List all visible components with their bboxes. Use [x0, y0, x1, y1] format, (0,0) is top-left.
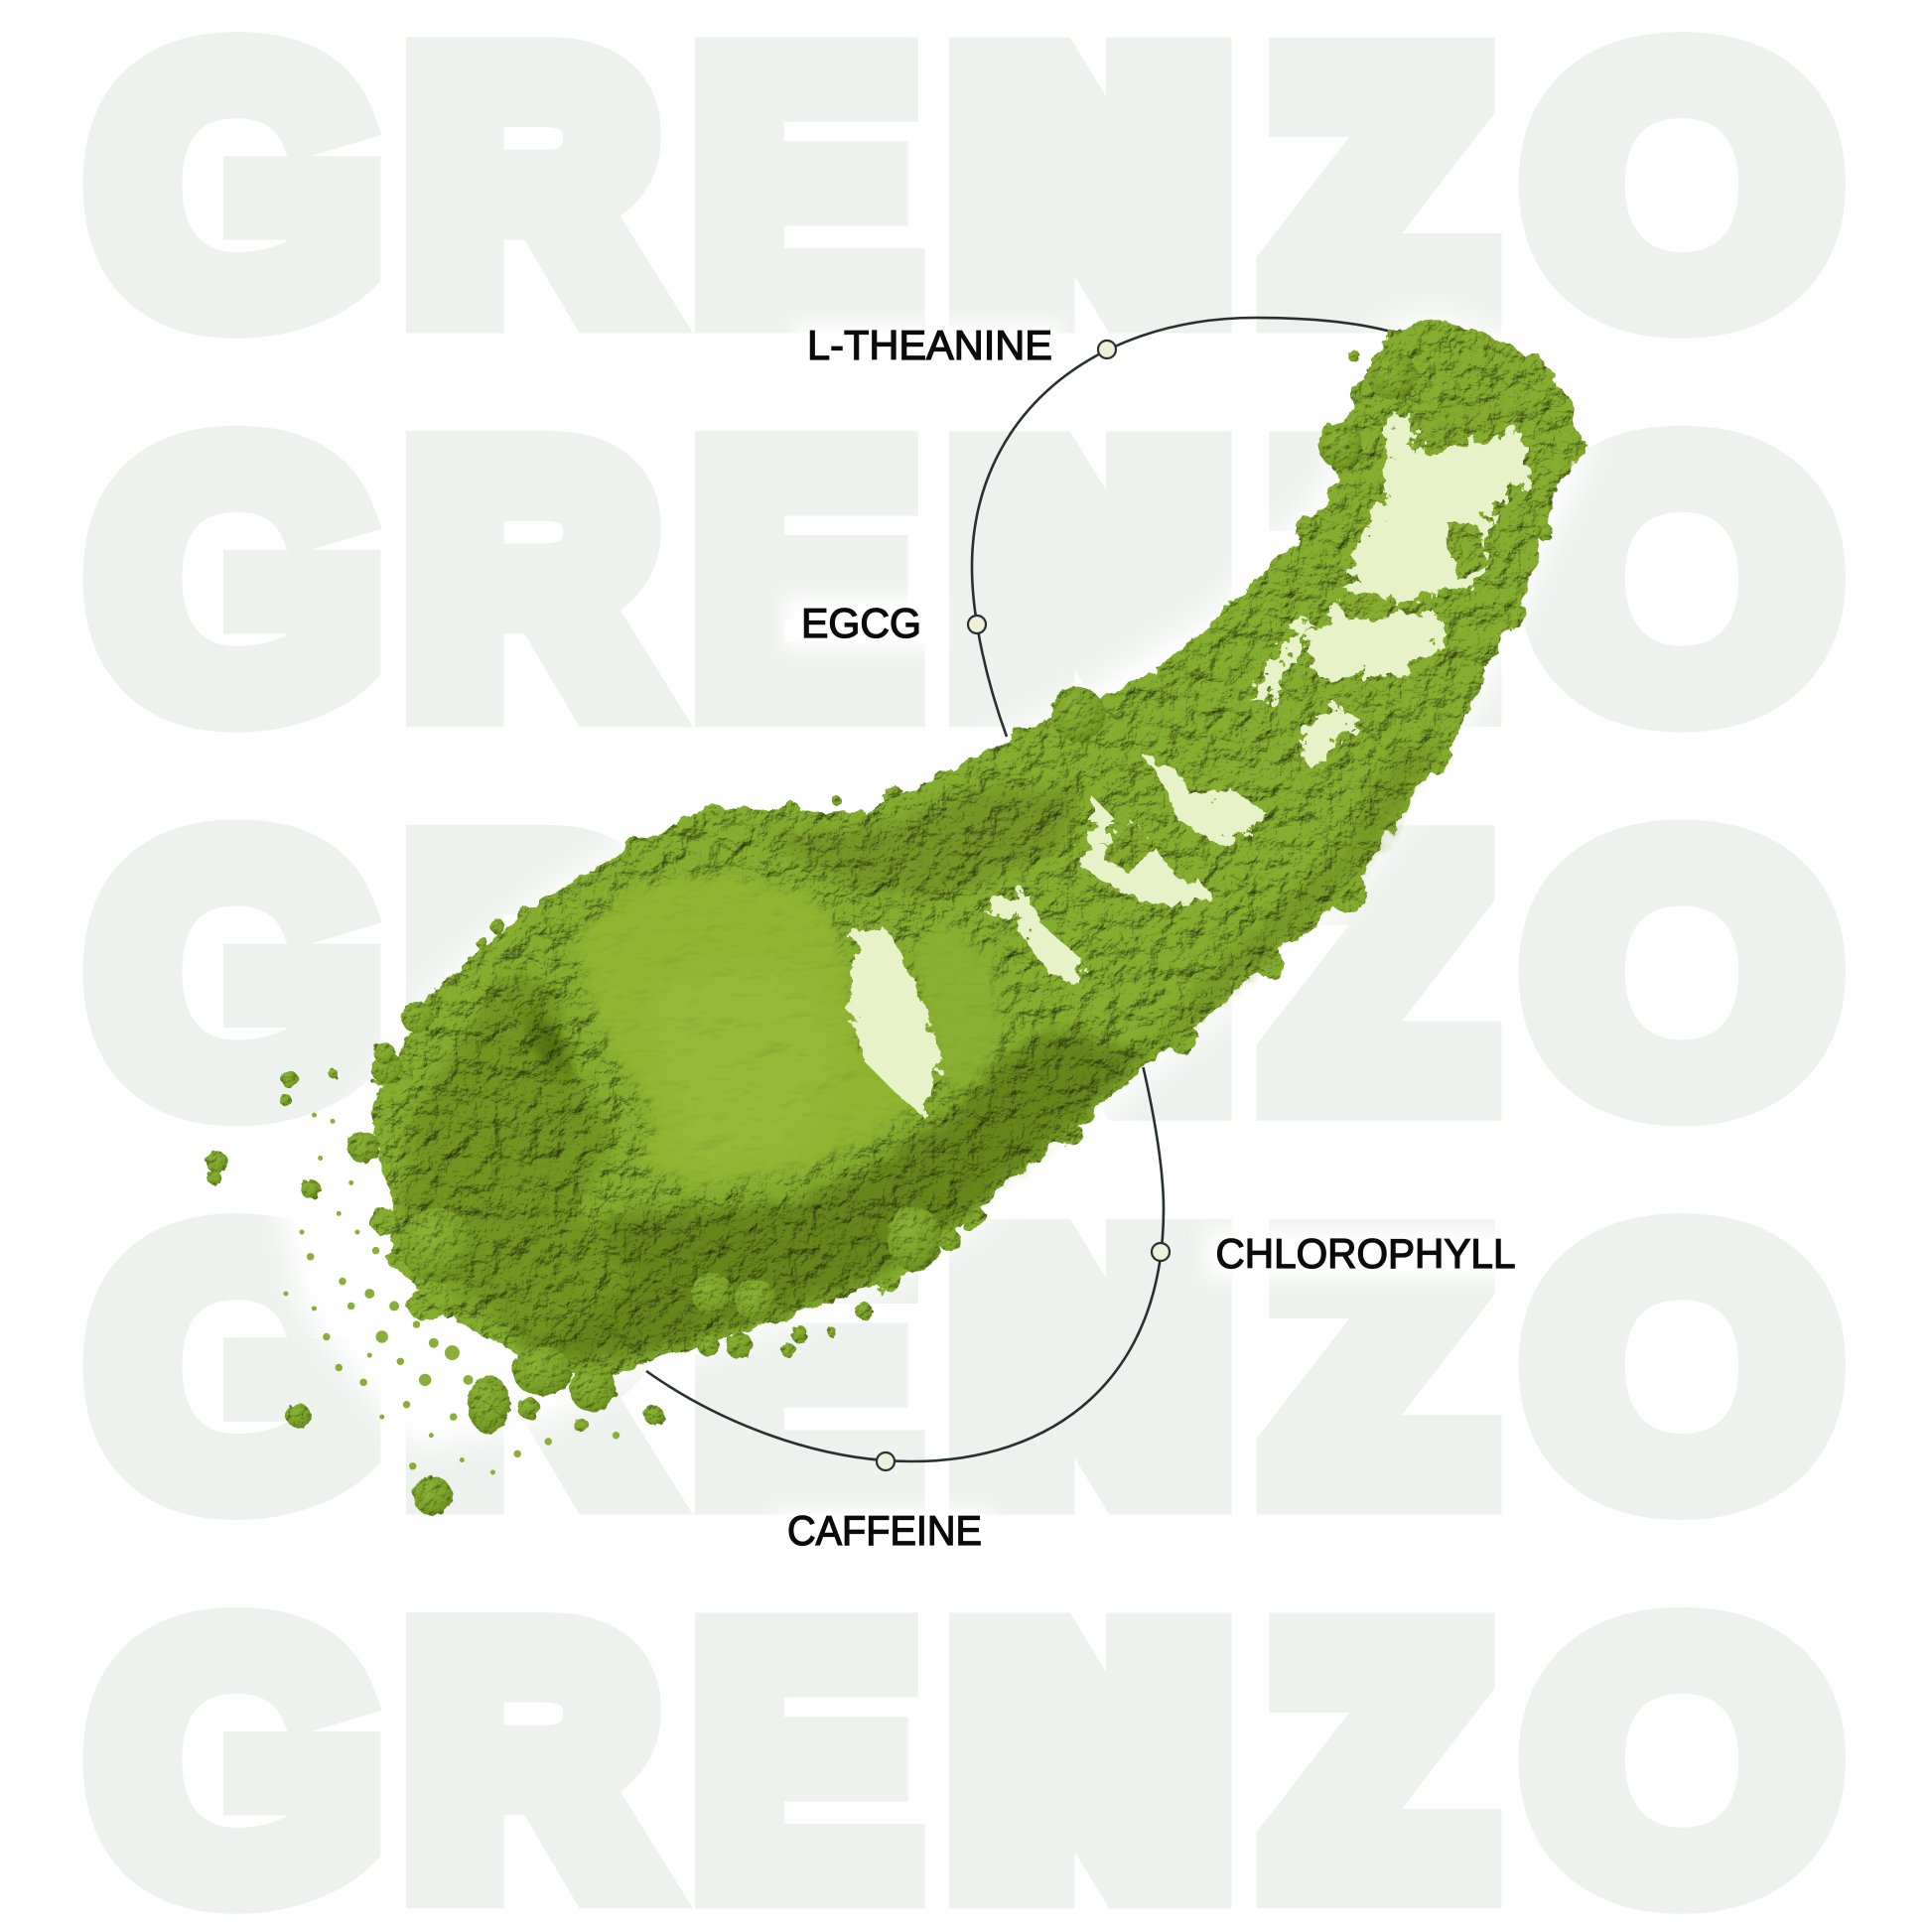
watermark row 3: GRENZO: N — [967, 794, 1214, 1151]
watermark row 4: GRENZO: N — [967, 1188, 1214, 1545]
powder lumps over patches — [1105, 394, 1534, 873]
white glow behind labels — [774, 323, 1524, 1554]
dark right-side shading — [1146, 740, 1442, 1047]
watermark row 4: GRENZO: Z — [1277, 1176, 1481, 1557]
watermark row 3: GRENZO: E — [693, 768, 918, 1177]
dark crack in heap — [523, 1004, 573, 1078]
smooth bowl in the powder — [573, 869, 1004, 1190]
watermark row 2: GRENZO: G — [90, 372, 381, 785]
watermark row 4: GRENZO: O — [1526, 1160, 1839, 1574]
watermark row 4: GRENZO — [90, 1160, 1839, 1574]
label: Caffeine: CAFFEINE — [787, 1507, 982, 1554]
label: Chlorophyll: CHLOROPHYLL — [1215, 1230, 1515, 1277]
pale exposed powder patches — [850, 413, 1530, 1115]
dark ridge shading — [763, 788, 1084, 899]
watermark row 3: GRENZO: Z — [1277, 782, 1481, 1164]
watermark row 3: GRENZO: O — [1526, 766, 1839, 1179]
watermark row 2: GRENZO — [90, 372, 1839, 785]
watermark row 3: GRENZO — [90, 765, 1839, 1179]
white haze around powder — [283, 318, 1584, 1442]
label: L-Theanine: L-THEANINE — [807, 322, 1052, 368]
watermark row 5: GRENZO: N — [967, 1582, 1214, 1932]
watermark row 1: GRENZO: Z — [1277, 0, 1481, 375]
fine scattered powder specks — [283, 1113, 620, 1474]
dark lower rim shading — [492, 1029, 1152, 1365]
watermark row 2: GRENZO: R — [407, 378, 656, 777]
matcha powder pile — [206, 318, 1585, 1515]
callout line: Chlorophyll and Caffeine — [646, 1067, 1164, 1461]
marker: Caffeine — [877, 1452, 895, 1470]
watermark row 4: GRENZO: E — [693, 1163, 918, 1572]
watermark row 1: GRENZO — [90, 0, 1839, 392]
marker: L-Theanine — [1098, 341, 1116, 358]
powder body with clumpy rim — [369, 318, 1585, 1374]
callout line: L-Theanine and EGCG — [972, 318, 1391, 737]
watermark row 3: GRENZO: G — [90, 765, 381, 1179]
dark left heap shading — [400, 973, 640, 1343]
watermark row 1: GRENZO: N — [967, 7, 1214, 363]
bumps along powder edge — [369, 382, 1585, 1323]
watermark row 2: GRENZO: E — [693, 374, 918, 783]
watermark row 5: GRENZO — [90, 1554, 1839, 1932]
marker: EGCG — [968, 616, 986, 633]
watermark row 4: GRENZO: G — [90, 1160, 381, 1574]
large loose powder clumps — [206, 349, 1554, 1515]
watermark row 2: GRENZO: N — [967, 400, 1214, 757]
watermark row 2: GRENZO: Z — [1277, 389, 1481, 769]
marker: Chlorophyll — [1152, 1243, 1170, 1261]
watermark row 2: GRENZO: O — [1526, 372, 1839, 785]
label: EGCG: EGCG — [801, 600, 921, 646]
watermark row 3: GRENZO: R — [407, 772, 656, 1172]
watermark row 4: GRENZO: R — [407, 1167, 656, 1566]
